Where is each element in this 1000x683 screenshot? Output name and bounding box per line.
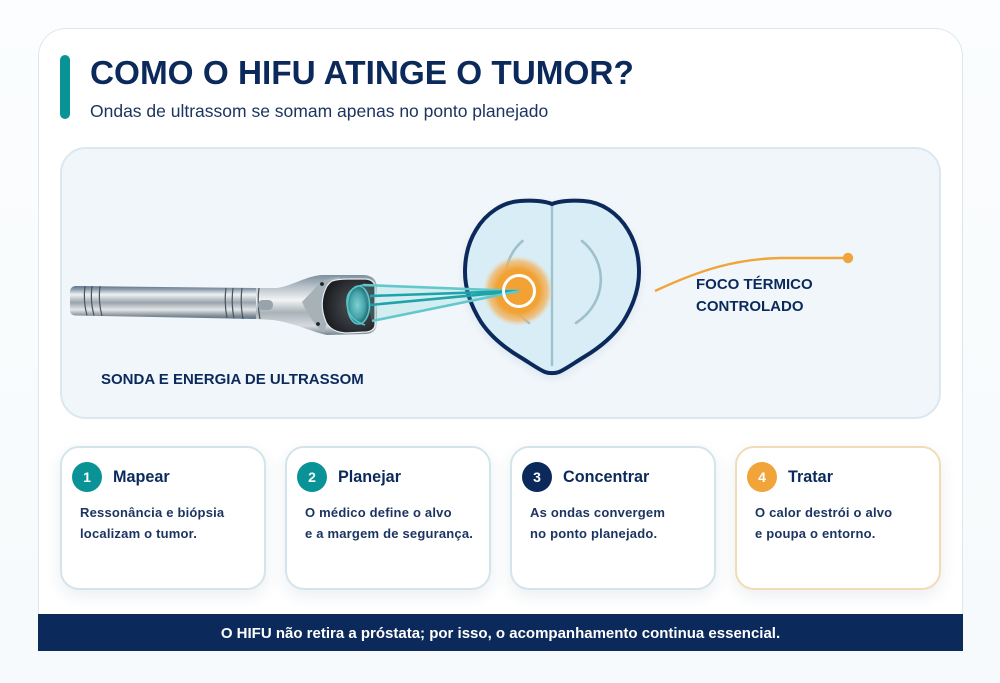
panel: illustration xyxy=(60,147,941,419)
footer banner xyxy=(38,614,963,651)
card: step 2 xyxy=(285,446,491,590)
callout label: FOCO TÉRMICO xyxy=(696,276,813,293)
card: step 2: Planejar xyxy=(338,468,401,486)
card: step 1: Mapear xyxy=(113,468,170,486)
prostate xyxy=(465,201,639,377)
card: step 4 xyxy=(735,446,941,590)
card: step 3 xyxy=(510,446,716,590)
title accent bar xyxy=(60,55,70,119)
card: step 4: e poupa o entorno. xyxy=(755,526,876,541)
card: step 4: Tratar xyxy=(788,468,833,486)
probe label: SONDA E ENERGIA DE ULTRASSOM xyxy=(101,371,364,388)
card: step 2: e a margem de segurança. xyxy=(305,526,473,541)
card: step 3: Concentrar xyxy=(563,468,649,486)
card: step 3: As ondas convergem xyxy=(530,505,665,520)
thermal focus glow xyxy=(483,256,553,326)
card: step 1: Ressonância e biópsia xyxy=(80,505,224,520)
card: step 3: no ponto planejado. xyxy=(530,526,657,541)
callout label xyxy=(696,276,813,315)
ultrasound beams xyxy=(363,285,519,321)
card: step 2: O médico define o alvo xyxy=(305,505,452,520)
footer banner: O HIFU não retira a próstata; por isso, o acompanhamento continua essencial. xyxy=(221,625,780,642)
callout line xyxy=(655,253,853,291)
card: step 1 xyxy=(60,446,266,590)
card: step 2: 2 xyxy=(308,469,316,485)
card: step 4: O calor destrói o alvo xyxy=(755,505,892,520)
card: step 4: 4 xyxy=(758,469,766,485)
card: step 3: 3 xyxy=(533,469,541,485)
callout label: CONTROLADO xyxy=(696,298,804,315)
card: step 1: 1 xyxy=(83,469,91,485)
card: step 1: localizam o tumor. xyxy=(80,526,197,541)
target ring xyxy=(504,276,534,306)
title: COMO O HIFU ATINGE O TUMOR? xyxy=(90,55,634,92)
ultrasound probe xyxy=(70,275,377,335)
subtitle: Ondas de ultrassom se somam apenas no ponto planejado xyxy=(90,101,548,121)
